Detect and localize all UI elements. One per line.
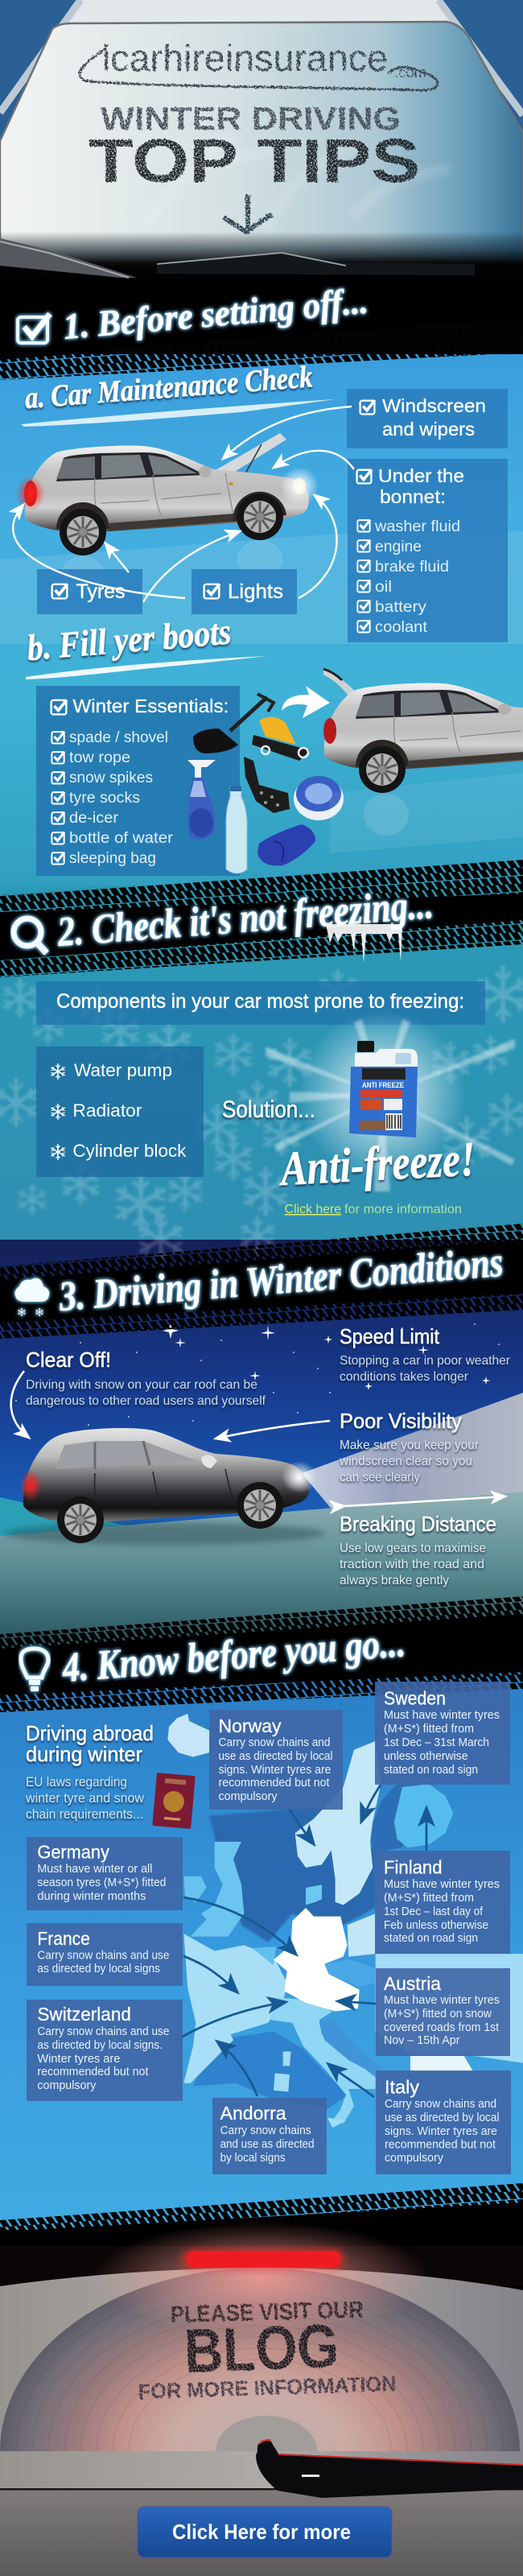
- rear window: [0, 2268, 523, 2491]
- title: winter driving: WINTER DRIVING: [101, 101, 401, 137]
- box: lights: [191, 569, 297, 614]
- text: anti-freeze: Anti-freeze!: [277, 1132, 476, 1195]
- text: poor visibility: can see clearly: [340, 1471, 420, 1484]
- box: winter essentials checklist: Winter Essentials:: [72, 696, 229, 716]
- box: winter essentials checklist: de-icer: [69, 810, 119, 827]
- heading: before setting off: 1. Before setting off...: [61, 280, 369, 347]
- icon: anti-freeze bottle: [349, 1041, 418, 1137]
- box: switzerland: [27, 2000, 183, 2101]
- box: windscreen and wipers: Windscreen: [382, 395, 486, 416]
- box: components list: Cylinder block: [72, 1141, 187, 1161]
- box: switzerland: Winter tyres are: [37, 2052, 120, 2066]
- box: windscreen and wipers: [347, 389, 508, 448]
- box: andorra: [212, 2098, 327, 2174]
- box: finland: stated on road sign: [384, 1931, 478, 1945]
- box: norway: signs. Winter tyres are: [219, 1763, 332, 1777]
- icicles: [326, 924, 402, 963]
- box: norway: recommended but not: [219, 1776, 330, 1790]
- car with bonnet open: [16, 433, 319, 595]
- icon: checkbox: [18, 314, 50, 343]
- box: under the bonnet checklist: Under the: [378, 465, 464, 486]
- box: windscreen and wipers: and wipers: [382, 419, 475, 440]
- text: poor visibility: windscreen clear so you: [339, 1455, 472, 1468]
- panel: know before you go: [25, 1682, 523, 2174]
- box: italy: recommended but not: [385, 2138, 496, 2151]
- brush underline: [26, 656, 267, 679]
- box: austria: covered roads from 1st: [384, 2021, 500, 2034]
- box: winter essentials checklist: spade / shovel: [69, 729, 168, 746]
- panel: frosted windscreen hero: [0, 0, 523, 294]
- box: sweden: stated on road sign: [384, 1763, 478, 1777]
- snowflake background: [0, 966, 523, 1265]
- text: please visit our: PLEASE VISIT OUR: [170, 2297, 364, 2328]
- box: norway: [209, 1710, 343, 1810]
- icon: snow cloud: [14, 1278, 49, 1316]
- band: section 4 heading strip: [0, 1596, 523, 1712]
- rear wiper: [256, 2439, 523, 2498]
- box: winter essentials checklist: [36, 686, 240, 876]
- box: components list: Water pump: [74, 1060, 172, 1080]
- box: winter essentials checklist: tow rope: [69, 749, 130, 766]
- car covered in snow: [4, 1428, 326, 1545]
- snowbank: [0, 1497, 161, 1550]
- box: andorra: and use as directed: [220, 2137, 315, 2151]
- text: poor visibility: Make sure you keep your: [340, 1439, 480, 1452]
- box: switzerland: recommended but not: [37, 2065, 149, 2079]
- box: sweden: Sweden: [384, 1687, 446, 1708]
- road: [0, 1492, 523, 1658]
- box: austria: Austria: [384, 1973, 441, 1994]
- box: finland: [375, 1851, 510, 1954]
- box: sweden: unless otherwise: [384, 1749, 468, 1763]
- arrow: clear off: [11, 1371, 29, 1438]
- box: italy: signs. Winter tyres are: [385, 2124, 497, 2138]
- box: sweden: 1st Dec – 31st March: [384, 1736, 489, 1749]
- title: top tips: TOP TIPS: [89, 127, 420, 196]
- icon: water bottle: [226, 786, 247, 873]
- box: under the bonnet checklist: battery: [375, 599, 427, 616]
- box: finland: Finland: [384, 1856, 443, 1877]
- box: france: as directed by local signs: [37, 1962, 160, 1975]
- box: finland: (M+S*) fitted from: [384, 1891, 474, 1905]
- heading: check it's not freezing: 2. Check it's not freezing...: [56, 881, 435, 956]
- ground sheen: [0, 531, 523, 644]
- arrow: poor visibility: [216, 1421, 330, 1439]
- arrows: maintenance callouts: [13, 407, 354, 602]
- text: clear off: Driving with snow on your car roof can be: [26, 1378, 257, 1392]
- arrow: braking distance: [344, 1496, 505, 1506]
- box: winter essentials checklist: bottle of water: [69, 830, 174, 847]
- heading: know before you go: 4. Know before you go...: [60, 1620, 407, 1691]
- box: germany: during winter months: [37, 1889, 146, 1903]
- box: italy: Carry snow chains and: [385, 2097, 496, 2111]
- box: andorra: Andorra: [220, 2103, 286, 2124]
- box: under the bonnet checklist: bonnet:: [380, 486, 446, 507]
- box: under the bonnet checklist: brake fluid: [375, 559, 449, 576]
- icon: sleeping bag: [257, 824, 315, 865]
- text: solution: Solution...: [222, 1096, 315, 1123]
- text: breaking distance: always brake gently: [340, 1574, 449, 1587]
- box: norway: Norway: [219, 1715, 282, 1736]
- text: breaking distance: traction with the road and: [340, 1558, 484, 1571]
- text: poor visibility: Poor Visibility: [340, 1409, 462, 1433]
- text: driving abroad intro: chain requirements...: [26, 1806, 143, 1822]
- box: italy: [376, 2070, 511, 2174]
- box: germany: Must have winter or all: [37, 1862, 152, 1876]
- box: components list: Radiator: [72, 1100, 142, 1121]
- box: components list: [36, 1046, 204, 1177]
- tread band: [0, 2183, 523, 2235]
- box: tyres: Tyres: [76, 580, 126, 603]
- text: driving abroad intro: [25, 1721, 154, 1822]
- box: germany: [27, 1837, 183, 1910]
- frosted glass: [0, 22, 523, 266]
- icon: tow rope: [252, 717, 310, 761]
- box: norway: compulsory: [219, 1790, 278, 1803]
- text: driving abroad intro: EU laws regarding: [26, 1774, 127, 1790]
- band: section 1 heading strip: [0, 280, 523, 380]
- box: winter essentials checklist: snow spikes: [69, 770, 153, 786]
- arrows: countries to map: [175, 1785, 426, 2097]
- logo written in frost: icarhireinsurance: [102, 37, 388, 79]
- band: section 3 heading strip: [0, 1224, 523, 1339]
- link: click here: for more information: [344, 1203, 462, 1216]
- box: finland: 1st Dec – last day of: [384, 1905, 484, 1918]
- heading: fill yer boots: b. Fill yer boots: [26, 610, 233, 668]
- text: for more information: FOR MORE INFORMATION: [138, 2372, 397, 2404]
- stars: [15, 1311, 500, 1426]
- text: speed limit: Speed Limit: [340, 1324, 440, 1348]
- box: switzerland: Carry snow chains and use: [37, 2025, 169, 2038]
- box: winter essentials checklist: tyre socks: [69, 790, 140, 807]
- wiped arc: [0, 2268, 520, 2451]
- box: austria: (M+S*) fitted on snow: [384, 2007, 492, 2021]
- box: norway: Carry snow chains and: [219, 1736, 330, 1749]
- glow rays behind bottle: [266, 1010, 515, 1191]
- box: components prompt: [36, 981, 485, 1025]
- text: driving abroad intro: during winter: [26, 1742, 142, 1766]
- icon: tyre socks tub: [294, 776, 344, 820]
- box: italy: use as directed by local: [385, 2111, 499, 2124]
- heading: car maintenance check: a. Car Maintenance Check: [24, 360, 314, 415]
- box: france: Carry snow chains and use: [37, 1948, 169, 1963]
- icon: passport: [152, 1773, 196, 1829]
- text: clear off: dangerous to other road users and yourself: [26, 1394, 266, 1408]
- box: lights: Lights: [228, 580, 283, 603]
- text: poor visibility: [339, 1409, 480, 1484]
- text: breaking distance: Breaking Distance: [340, 1512, 496, 1536]
- button: click here for more: [138, 2507, 392, 2557]
- button: click here for more: Click Here for more: [172, 2520, 351, 2544]
- panel: driving in winter conditions: [0, 1311, 523, 1658]
- box: italy: Italy: [385, 2077, 420, 2098]
- windscreen frame: [0, 0, 523, 115]
- panel: car maintenance check: [0, 360, 523, 876]
- wiper hub clearing: [216, 2416, 317, 2451]
- icon: light bulb: [21, 1649, 48, 1689]
- panel: blog call to action on rear window: [0, 2183, 523, 2576]
- box: components prompt: Components in your car most prone to freezing:: [56, 990, 464, 1013]
- icon: snow spikes: [244, 757, 290, 813]
- text: speed limit: Stopping a car in poor weather: [340, 1354, 511, 1368]
- text: clear off: [26, 1348, 266, 1408]
- box: under the bonnet checklist: engine: [375, 539, 422, 555]
- box: tyres: [37, 569, 142, 614]
- icon: de-icer spray bottle: [187, 760, 216, 840]
- box: germany: season tyres (M+S*) fitted: [37, 1876, 166, 1889]
- box: under the bonnet checklist: coolant: [375, 619, 428, 636]
- wiper blade: [0, 238, 523, 294]
- brake light: [181, 2248, 345, 2269]
- box: norway: use as directed by local: [219, 1749, 333, 1763]
- band: section 2 heading strip: [0, 860, 523, 977]
- text: driving abroad intro: winter tyre and snow: [25, 1790, 145, 1806]
- logo written in frost: [80, 37, 438, 90]
- car with open boot: [323, 669, 523, 853]
- box: sweden: [375, 1682, 510, 1785]
- box: andorra: Carry snow chains: [220, 2124, 311, 2137]
- box: switzerland: compulsory: [37, 2079, 97, 2092]
- car roof: [48, 0, 467, 36]
- box: winter essentials checklist: sleeping bag: [69, 850, 156, 867]
- text: driving abroad intro: Driving abroad: [26, 1721, 154, 1745]
- text: speed limit: [340, 1324, 511, 1384]
- text: breaking distance: [340, 1512, 496, 1587]
- link: click here: Click here: [285, 1203, 341, 1216]
- box: switzerland: as directed by local signs.: [37, 2038, 163, 2052]
- box: italy: compulsory: [385, 2151, 443, 2165]
- text: clear off: Clear Off!: [26, 1348, 111, 1372]
- text: speed limit: conditions takes longer: [340, 1370, 469, 1384]
- box: under the bonnet checklist: washer fluid: [374, 518, 460, 535]
- icon: shovel: [193, 694, 274, 753]
- box: austria: Nov – 15th Apr: [384, 2033, 460, 2047]
- box: switzerland: Switzerland: [37, 2004, 131, 2025]
- car body: [0, 2487, 523, 2576]
- headlight beam: [302, 1393, 523, 1512]
- box: sweden: Must have winter tyres: [384, 1708, 500, 1722]
- icon: magnifier: [14, 919, 47, 953]
- box: germany: Germany: [37, 1842, 109, 1863]
- box: andorra: by local signs: [220, 2151, 286, 2165]
- box: sweden: (M+S*) fitted from: [384, 1722, 474, 1736]
- box: under the bonnet checklist: [348, 459, 508, 642]
- icon: anti-freeze bottle: ANTI FREEZE: [362, 1081, 404, 1089]
- brush underline: [21, 399, 335, 427]
- box: under the bonnet checklist: oil: [375, 579, 392, 596]
- link: click here: [285, 1203, 462, 1216]
- box: austria: [376, 1968, 510, 2056]
- box: austria: Must have winter tyres: [384, 1993, 500, 2007]
- map of europe: [167, 1714, 523, 2128]
- box: finland: Feb unless otherwise: [384, 1918, 488, 1932]
- box: france: [27, 1923, 183, 1986]
- arrow: items into boot: [282, 686, 330, 718]
- logo written in frost: .com: [394, 64, 426, 80]
- icon: frost arrow down: [224, 195, 272, 232]
- box: finland: Must have winter tyres: [384, 1877, 500, 1891]
- panel: check it's not freezing: [0, 966, 523, 1265]
- text: blog: BLOG: [183, 2312, 340, 2386]
- text: breaking distance: Use low gears to maximise: [340, 1542, 486, 1555]
- box: france: France: [37, 1928, 90, 1949]
